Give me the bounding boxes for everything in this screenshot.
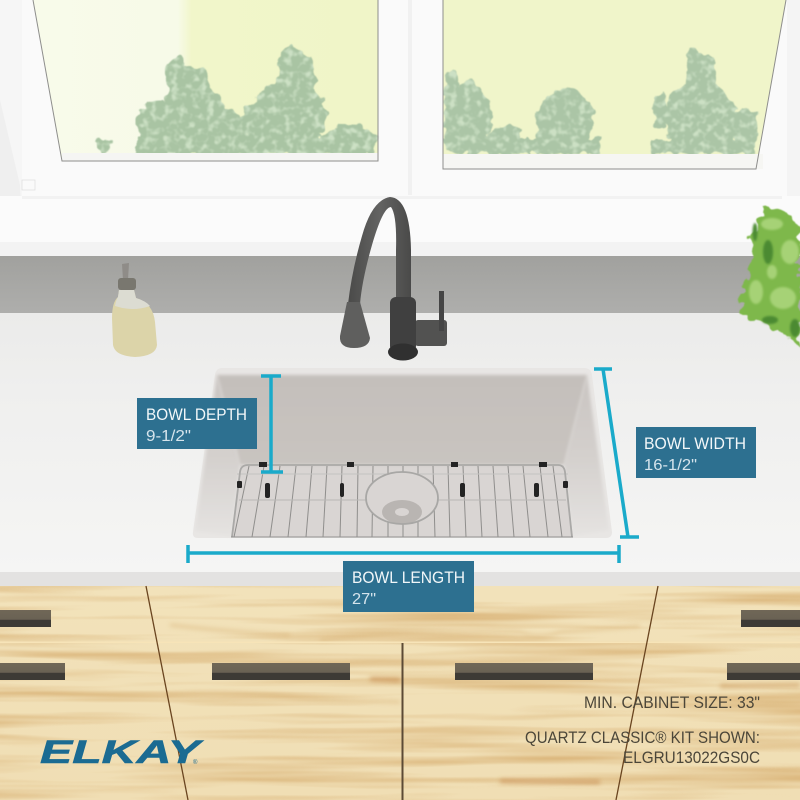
faucet [340, 197, 447, 360]
window pane: left [33, 0, 378, 161]
cabinet gaps [146, 586, 658, 800]
window sill [0, 196, 800, 256]
sink floor [231, 465, 573, 537]
width arrow [594, 369, 639, 537]
backsplash [0, 256, 800, 313]
length label [343, 561, 474, 612]
sink basin [193, 368, 612, 538]
cabinet fronts [0, 586, 800, 800]
depth label [137, 398, 257, 449]
length arrow [188, 545, 619, 563]
width label: BOWL WIDTH [644, 434, 746, 453]
cabinet size and kit note [525, 693, 760, 767]
depth label: BOWL DEPTH [146, 405, 247, 424]
drain strainer [366, 472, 438, 524]
minimum cabinet size: MIN. CABINET SIZE: 33" [584, 693, 760, 712]
potted herb plant [738, 205, 800, 350]
cabinet handles [0, 610, 800, 680]
sink rim [193, 368, 612, 538]
trees: left pane [95, 45, 376, 156]
grid clips [237, 462, 568, 498]
soap bottle [112, 263, 157, 357]
countertop [0, 313, 800, 586]
window wall [0, 0, 800, 235]
dimension: bowl depth [137, 376, 283, 472]
logo: Elkay: ® [193, 759, 198, 766]
dimension: bowl width [594, 369, 756, 537]
depth arrow [261, 376, 283, 472]
length label: 27" [352, 591, 376, 608]
sink back wall [217, 375, 587, 465]
window pane: right [436, 0, 786, 169]
wood grain [0, 586, 800, 800]
width label: 16-1/2" [644, 457, 697, 474]
logo: Elkay [40, 734, 204, 770]
kit name: QUARTZ CLASSIC® KIT SHOWN: [525, 728, 760, 747]
depth label: 9-1/2" [146, 428, 191, 445]
width label [636, 427, 756, 478]
dimension: bowl length [188, 545, 619, 612]
sink right wall [564, 375, 609, 536]
logo: Elkay: ELKAY [40, 734, 204, 770]
trees: right pane [444, 49, 758, 154]
wire bottom grid [231, 465, 573, 537]
sink left wall [195, 375, 240, 536]
kit model number: ELGRU13022GS0C [623, 748, 760, 767]
length label: BOWL LENGTH [352, 568, 465, 587]
